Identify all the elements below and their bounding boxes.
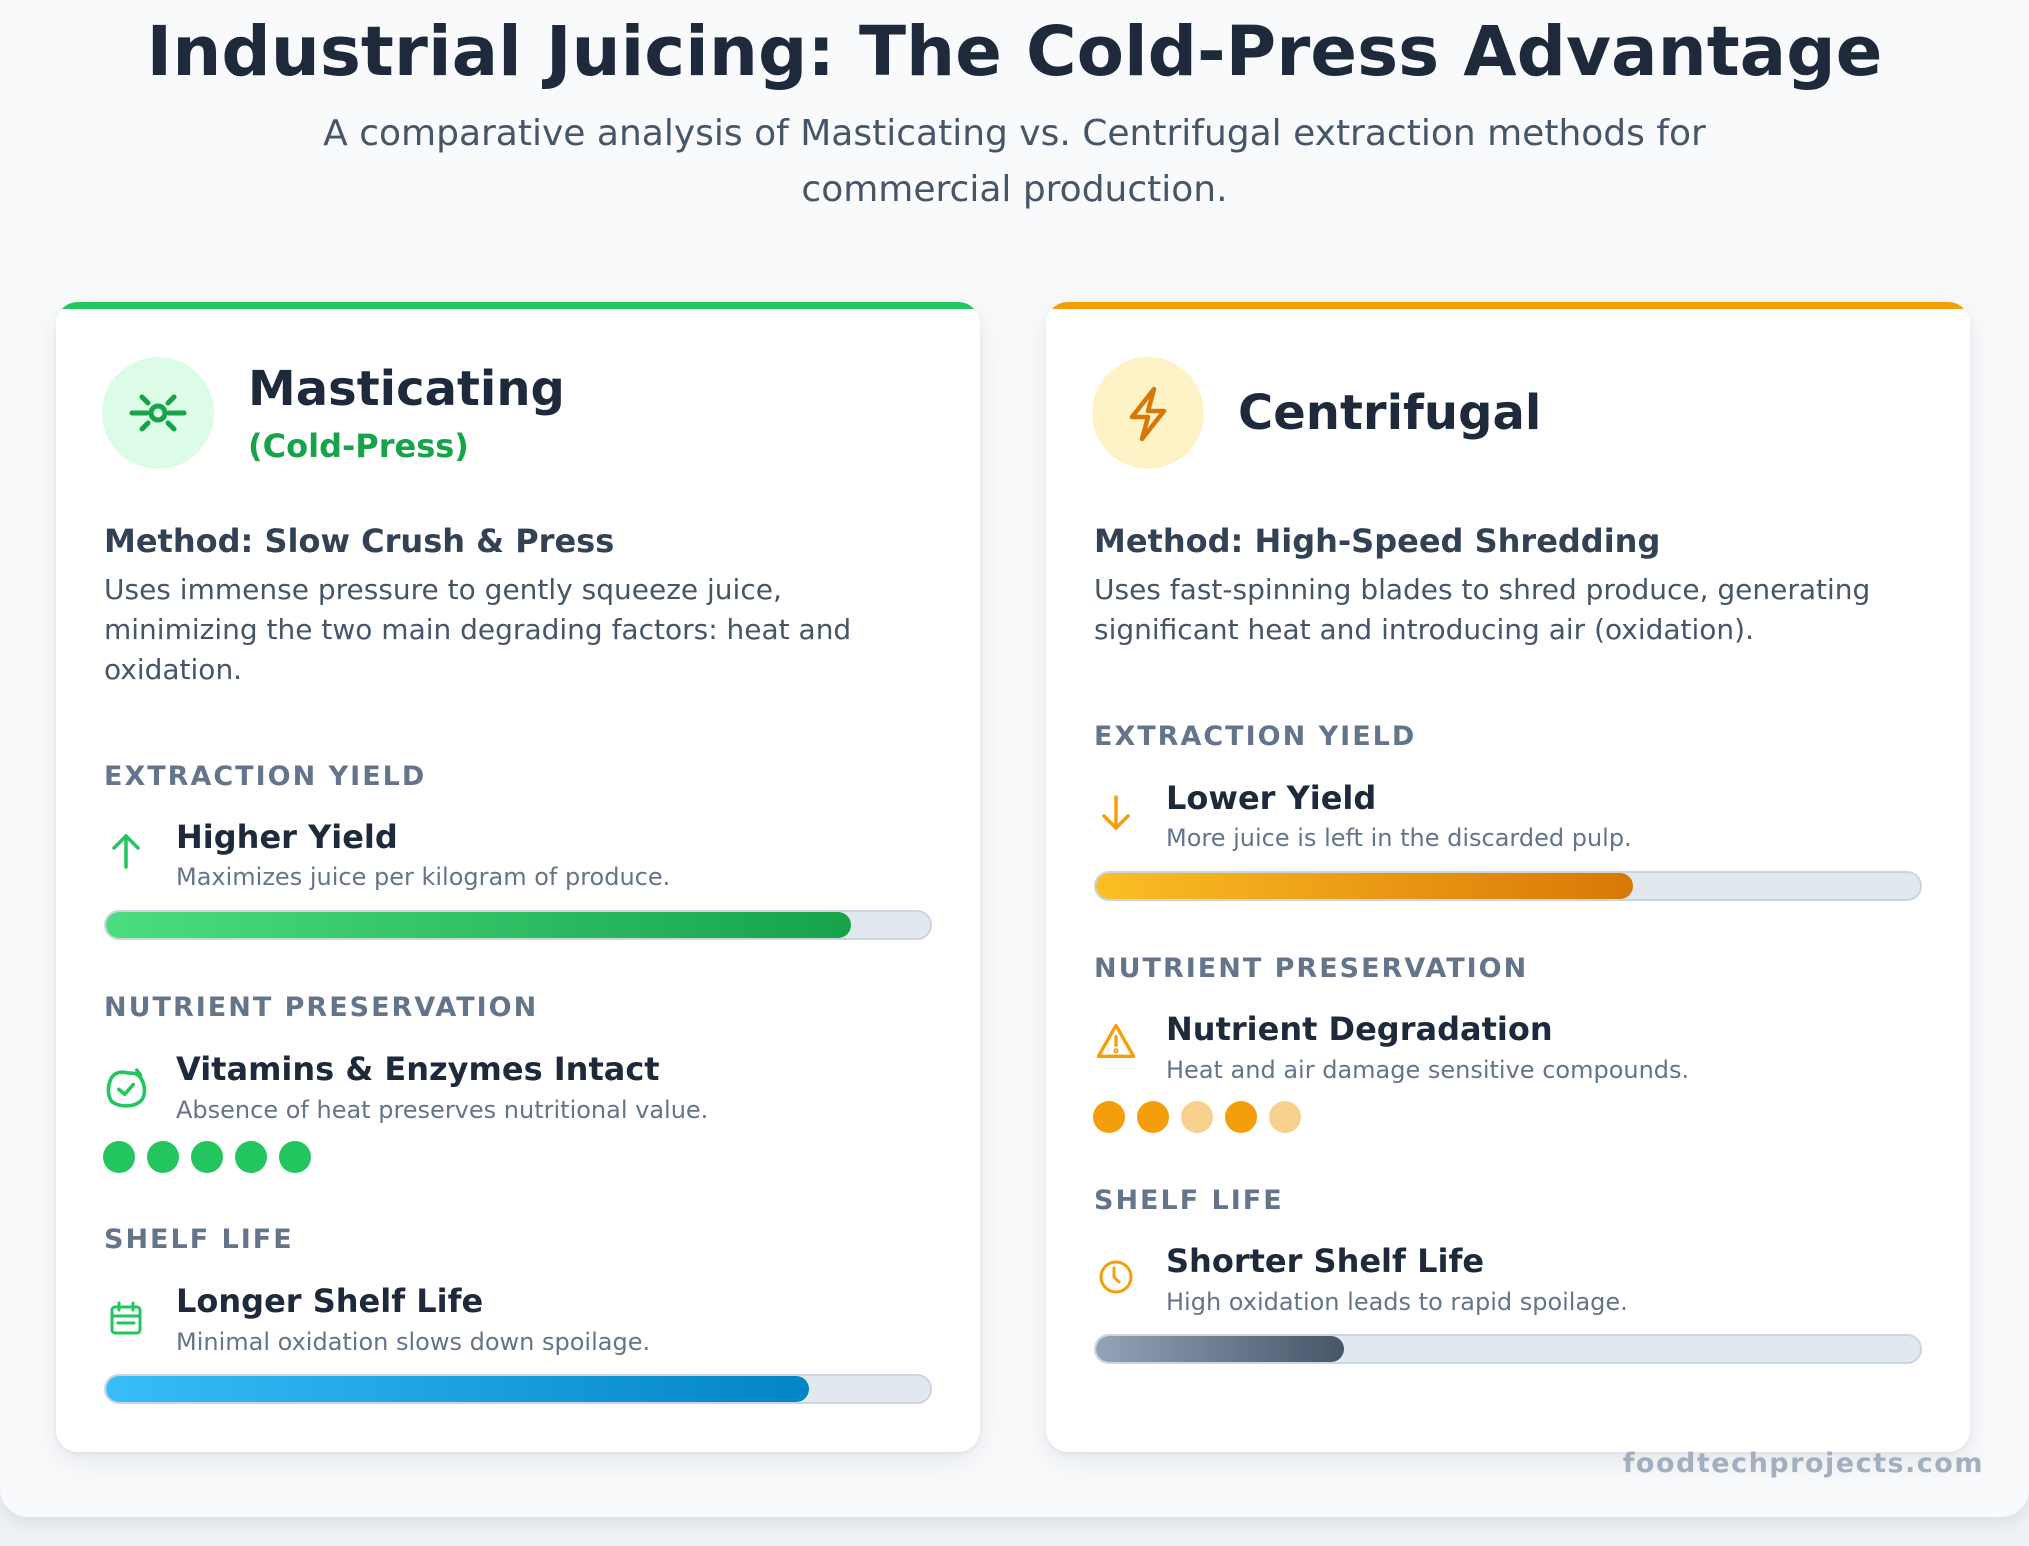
icon: cold press gear [102,357,214,469]
method description [104,573,851,686]
method description: Uses fast-spinning blades to shred produce, generating [1094,573,1870,606]
icon: clock [1100,1260,1132,1294]
row title: longer shelf life: Longer Shelf Life [176,1282,483,1320]
bar: yield 90% [104,910,932,940]
label: shelf life: SHELF LIFE [1094,1185,1284,1216]
row text: More juice is left in the discarded pulp. [1166,824,1632,852]
rating dots 3/5 [1093,1101,1301,1133]
icon: warning [1096,1024,1136,1058]
method description: oxidation. [104,653,242,686]
icon: down arrow [1102,795,1130,830]
title: Industrial Juicing: The Cold-Press Advantage [147,12,1882,92]
heading: centrifugal: Centrifugal [1238,385,1541,441]
label: shelf life: SHELF LIFE [104,1224,294,1255]
method heading: Method: High-Speed Shredding [1094,522,1660,560]
subtitle [323,113,1706,210]
method description: Uses immense pressure to gently squeeze juice, [104,573,782,606]
method heading: Method: Slow Crush & Press [104,522,614,560]
row text: Minimal oxidation slows down spoilage. [176,1328,650,1356]
rating dots 5/5 [103,1141,311,1173]
bar: yield 65% [1094,871,1922,901]
label: extraction yield: EXTRACTION YIELD [104,761,426,792]
icon: vitamin check [106,1068,146,1108]
label: extraction yield: EXTRACTION YIELD [1094,721,1416,752]
label: nutrient preservation: NUTRIENT PRESERVATION [1094,953,1528,984]
method description: minimizing the two main degrading factors: heat and [104,613,851,646]
panel: masticating [56,302,980,1452]
row text: Absence of heat preserves nutritional value. [176,1096,708,1124]
icon: up arrow [112,834,140,869]
heading: masticating: Masticating [248,361,565,417]
panel: centrifugal [1046,302,1970,1452]
bar: shelf life 85% [104,1374,932,1404]
subheading: cold-press: (Cold-Press) [248,427,469,465]
row title: vitamins: Vitamins & Enzymes Intact [176,1050,660,1088]
row text: Maximizes juice per kilogram of produce. [176,863,670,891]
method description [1094,573,1870,646]
icon: calendar [110,1302,142,1334]
bar: shelf life 30% [1094,1334,1922,1364]
label: nutrient preservation: NUTRIENT PRESERVATION [104,992,538,1023]
subtitle: A comparative analysis of Masticating vs. Centrifugal extraction methods for [323,113,1706,154]
subtitle: commercial production. [801,169,1228,210]
row text: High oxidation leads to rapid spoilage. [1166,1288,1628,1316]
row text: Heat and air damage sensitive compounds. [1166,1056,1689,1084]
icon: lightning [1092,357,1204,469]
row title: nutrient degradation: Nutrient Degradation [1166,1010,1553,1048]
method description: significant heat and introducing air (oxidation). [1094,613,1754,646]
row title: lower yield: Lower Yield [1166,779,1376,817]
footer: source: foodtechprojects.com [1623,1448,1984,1479]
row title: higher yield: Higher Yield [176,818,398,856]
row title: shorter shelf life: Shorter Shelf Life [1166,1242,1484,1280]
